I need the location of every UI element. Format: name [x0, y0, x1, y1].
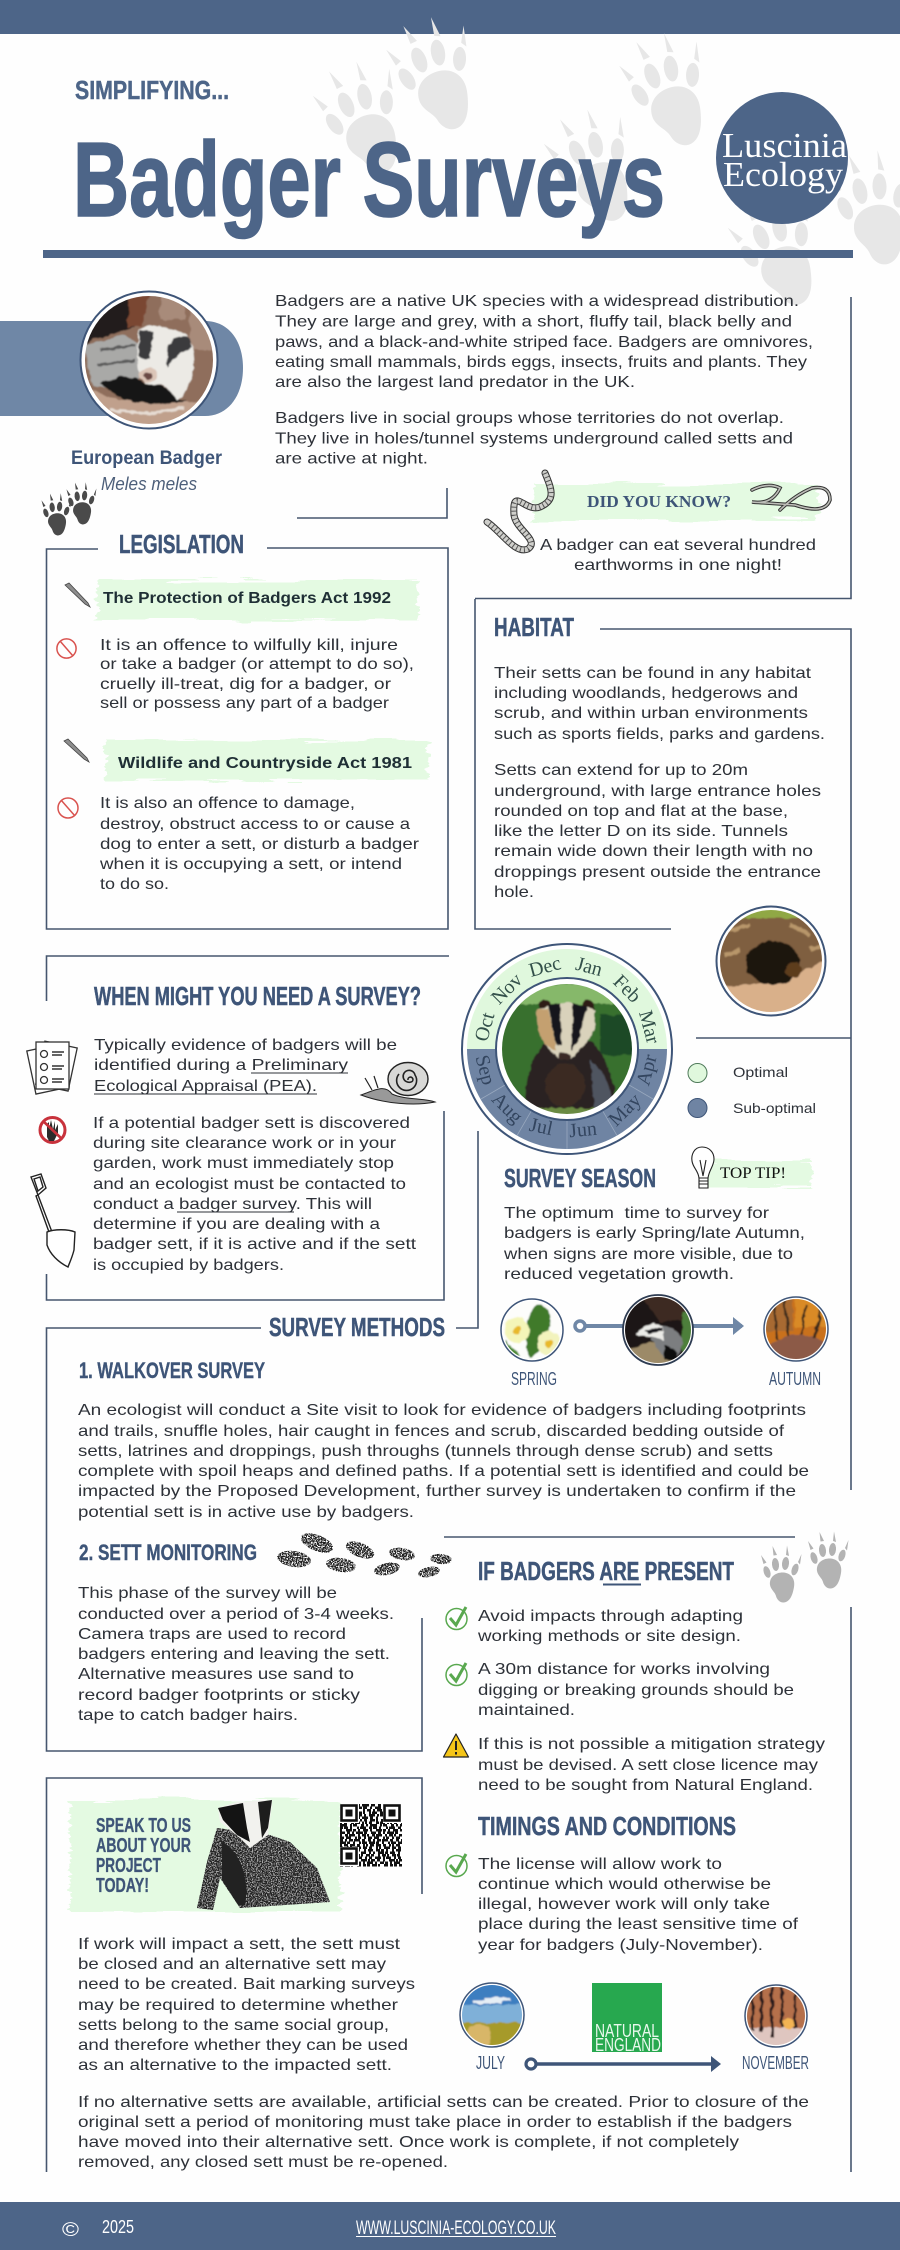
alternative sett text: be closed and an alternative sett may	[78, 1956, 386, 1973]
latin name: Meles meles	[101, 474, 197, 494]
legend	[688, 1064, 816, 1118]
icon: grey paws	[761, 1532, 848, 1603]
season text: reduced vegetation growth.	[504, 1266, 734, 1283]
photo: badger on grass	[500, 980, 634, 1116]
panel: survey season	[501, 1147, 828, 1389]
season text: when signs are more visible, due to	[503, 1246, 793, 1263]
artificial sett text: have moved into their alternative sett. Once work is complete, if not completely	[78, 2134, 739, 2151]
panel: survey season: AUTUMN	[769, 1369, 821, 1389]
call to action: SPEAK TO US	[96, 1815, 191, 1837]
highlight brush	[534, 484, 818, 520]
panel: if badgers are present: NOVEMBER	[742, 2053, 809, 2073]
list item 3: If this is not possible a mitigation strategy	[478, 1736, 825, 1753]
list item 3	[478, 1736, 825, 1794]
sett monitoring text: record badger footprints or sticky	[78, 1687, 360, 1704]
list item 3: must be devised. A sett close licence may	[478, 1757, 818, 1774]
icon: prohibited 2	[58, 798, 78, 818]
heading: DID YOU KNOW?	[587, 492, 731, 511]
panel: survey season calendar wheel	[462, 944, 672, 1154]
illustration: sketched badger	[197, 1800, 330, 1910]
icon: checklist	[27, 1041, 77, 1094]
sub-optimal months segment	[467, 1049, 667, 1149]
alternative sett text: may be required to determine whether	[78, 1997, 399, 2014]
season labels: SPRING	[511, 1369, 557, 1389]
panel: habitat	[475, 599, 851, 1016]
season text: badgers is early Spring/late Autumn,	[504, 1225, 805, 1242]
timings heading: TIMINGS AND CONDITIONS	[478, 1811, 736, 1841]
icon: light bulb	[692, 1147, 714, 1188]
timings text: continue which would otherwise be	[478, 1876, 771, 1893]
timing labels: JULY	[476, 2053, 505, 2073]
background paw prints	[307, 9, 900, 318]
panel: legislation	[46, 529, 448, 929]
icon: curled worm	[752, 485, 830, 510]
photo: July field	[460, 1983, 524, 2049]
panel: survey methods	[46, 1312, 809, 1751]
sub-optimal month labels: Aug	[487, 1088, 527, 1128]
icon: snail	[361, 1062, 435, 1104]
intro text: eating small mammals, birds eggs, insects, fruits and plants. They	[275, 354, 807, 371]
list item 3: need to be sought from Natural England.	[478, 1777, 813, 1794]
PEA text	[94, 1037, 397, 1095]
habitat text: remain wide down their length with no	[494, 843, 813, 860]
intro text: They are large and grey, with a short, fluffy tail, black belly and	[275, 314, 792, 330]
highlight brush	[70, 1800, 340, 1912]
intro text: Badgers are a native UK species with a widespread distribution.	[275, 293, 799, 310]
list item 1: working methods or site design.	[477, 1628, 741, 1645]
walkover heading: 1. WALKOVER SURVEY	[79, 1358, 265, 1383]
habitat text: including woodlands, hedgerows and	[494, 685, 798, 702]
footer	[0, 2202, 900, 2250]
timings text: year for badgers (July-November).	[478, 1937, 763, 1954]
offence text 1	[100, 637, 414, 712]
walkover text: setts, latrines and droppings, push throughs (tunnels through dense scrub) and setts	[78, 1443, 773, 1460]
photo: spring primroses	[501, 1298, 564, 1362]
sett monitoring text: Camera traps are used to record	[78, 1626, 346, 1643]
season arrow	[575, 1317, 744, 1335]
icon: footprints	[276, 1529, 452, 1579]
top tip: TOP TIP!	[720, 1165, 786, 1182]
offence text 1: or take a badger (or attempt to do so),	[100, 656, 414, 673]
PEA text: Ecological Appraisal (PEA).	[94, 1078, 317, 1095]
walkover text: and trails, snuffle holes, hair caught in fences and scrub, discarded bedding outside of	[78, 1423, 785, 1440]
optimal months segment	[467, 949, 667, 1049]
habitat text: underground, with large entrance holes	[494, 783, 821, 800]
icon: check 3	[446, 1854, 467, 1876]
top tip	[692, 1147, 812, 1188]
alternative sett text	[78, 1936, 415, 2074]
alternative sett text: and therefore whether they can be used	[78, 2037, 408, 2054]
offence text 1: cruelly ill-treat, dig for a badger, or	[100, 676, 392, 693]
list item 2	[478, 1661, 794, 1719]
highlight brush 1	[97, 580, 418, 620]
legend: Sub-optimal	[733, 1100, 816, 1116]
icon: pencil 2	[64, 739, 89, 762]
act title 2: Wildlife and Countryside Act 1981	[118, 755, 412, 772]
sett discovery text	[93, 1115, 417, 1274]
logo: Luscinia Ecology	[716, 92, 848, 224]
heading: IF BADGERS ARE PRESENT	[478, 1556, 734, 1586]
sub-optimal month labels: Jul	[527, 1114, 555, 1140]
alternative sett text: as an alternative to the impacted sett.	[78, 2057, 392, 2074]
sett discovery text: If a potential badger sett is discovered	[93, 1115, 410, 1132]
panel frame: intro	[297, 297, 851, 598]
intro text: are also the largest land predator in the UK.	[275, 374, 635, 391]
month labels: Dec	[527, 952, 564, 982]
heading: WHEN MIGHT YOU NEED A SURVEY?	[94, 981, 421, 1011]
habitat text: scrub, and within urban environments	[494, 705, 808, 722]
fact text: A badger can eat several hundred	[540, 537, 816, 554]
icon: check 2	[446, 1663, 467, 1686]
sett monitoring text	[78, 1585, 394, 1724]
species name: European Badger	[71, 448, 223, 469]
month labels: Oct	[471, 1010, 499, 1044]
habitat text: hole.	[494, 884, 534, 901]
sett monitoring heading: 2. SETT MONITORING	[79, 1540, 257, 1565]
call to action: PROJECT	[96, 1855, 161, 1877]
sett monitoring text: Alternative measures use sand to	[78, 1666, 354, 1683]
walkover text: potential sett is in active use by badgers.	[78, 1504, 414, 1521]
intro text	[275, 293, 813, 468]
legend: Optimal	[733, 1064, 788, 1080]
icon: small paws	[41, 482, 96, 535]
blue band	[0, 321, 243, 416]
sub-optimal month labels: Jun	[568, 1118, 598, 1142]
intro text: paws, and a black-and-white striped face. Badgers are omnivores,	[275, 334, 813, 351]
panel: if badgers are present	[444, 1532, 848, 2073]
sett discovery text: conduct a badger survey. This will	[93, 1196, 372, 1213]
artificial sett text: If no alternative setts are available, artificial setts can be created. Prior to closure of the	[78, 2094, 809, 2111]
list item 2: maintained.	[478, 1702, 575, 1719]
month labels	[471, 952, 664, 1046]
highlight brush 2	[106, 740, 428, 780]
act title 1: The Protection of Badgers Act 1992	[103, 590, 391, 607]
panel: did you know	[487, 473, 830, 574]
habitat text: droppings present outside the entrance	[494, 864, 821, 881]
month labels: Jan	[573, 953, 605, 981]
list item 1: Avoid impacts through adapting	[478, 1608, 743, 1625]
year: 2025	[102, 2217, 134, 2237]
intro text: are active at night.	[275, 450, 428, 468]
offence text 2	[99, 795, 420, 893]
logo: Luscinia Ecology: Luscinia	[722, 126, 847, 165]
heading: SURVEY SEASON	[504, 1163, 656, 1193]
habitat text	[494, 665, 825, 901]
walkover text	[78, 1402, 809, 1521]
offence text 2: dog to enter a sett, or disturb a badger	[100, 836, 420, 853]
panel: species portrait	[0, 290, 243, 494]
logo: Luscinia Ecology: Ecology	[723, 155, 844, 194]
sett monitoring text: badgers entering and leaving the sett.	[78, 1646, 390, 1663]
sett discovery text: determine if you are dealing with a	[93, 1216, 380, 1233]
month labels: Nov	[487, 969, 527, 1009]
offence text 2: to do so.	[100, 876, 169, 893]
offence text 2: destroy, obstruct access to or cause a	[100, 816, 410, 833]
copyright: ©	[62, 2220, 79, 2241]
alternative sett text: need to be created. Bait marking surveys	[78, 1976, 415, 1993]
alternative sett text: setts belong to the same social group,	[78, 2017, 389, 2034]
call to action: TODAY!	[96, 1875, 149, 1897]
walkover text: An ecologist will conduct a Site visit to look for evidence of badgers including footprints	[78, 1402, 806, 1419]
sett discovery text: is occupied by badgers.	[93, 1257, 284, 1274]
icon: pencil 1	[65, 583, 90, 607]
intro text: They live in holes/tunnel systems underground called setts and	[275, 430, 793, 448]
list item 2: A 30m distance for works involving	[478, 1661, 770, 1678]
sub-optimal month labels: Apr	[632, 1052, 662, 1088]
icon: check 1	[446, 1607, 467, 1630]
photo: autumn woodland	[764, 1297, 828, 1361]
website: WWW.LUSCINIA-ECOLOGY.CO.UK	[356, 2218, 556, 2239]
habitat text: such as sports fields, parks and gardens.	[494, 726, 825, 743]
sett discovery text: during site clearance work or in your	[93, 1135, 397, 1152]
photo: November forest	[745, 1985, 807, 2048]
month labels: Feb	[609, 971, 645, 1007]
month labels: Mar	[634, 1008, 664, 1046]
timing arrow	[526, 2056, 721, 2072]
icon: shovel	[31, 1174, 75, 1267]
timings text: place during the least sensitive time of	[478, 1916, 799, 1933]
timings text	[478, 1856, 799, 1954]
walkover text: impacted by the Proposed Development, further survey is undertaken to confirm if the	[78, 1483, 796, 1500]
list item 2: digging or breaking grounds should be	[478, 1682, 794, 1699]
right frame: season panel	[696, 906, 851, 2172]
habitat text: Their setts can be found in any habitat	[494, 665, 812, 682]
heading: HABITAT	[494, 612, 574, 642]
artificial sett text: original sett a period of monitoring must take place in order to establish if the badgers	[78, 2114, 792, 2131]
header divider	[43, 250, 853, 258]
offence text 2: It is also an offence to damage,	[100, 795, 355, 812]
frame: survey season left rule	[456, 1131, 478, 1328]
offence text 1: sell or possess any part of a badger	[100, 695, 390, 712]
timings text: illegal, however work will only take	[478, 1896, 770, 1913]
artificial sett text	[78, 2094, 809, 2171]
season text	[503, 1205, 805, 1283]
heading: SURVEY METHODS	[269, 1312, 445, 1342]
habitat text: like the letter D on its side. Tunnels	[494, 823, 788, 840]
artificial sett text: removed, any closed sett must be re-opened.	[78, 2154, 448, 2171]
panel: speak to us	[46, 1778, 809, 2172]
icon: prohibited 1	[57, 639, 76, 658]
title: Badger Surveys	[73, 121, 665, 239]
sub-optimal month labels: May	[604, 1089, 646, 1131]
sett monitoring text: conducted over a period of 3-4 weeks.	[78, 1606, 394, 1623]
header bar	[0, 0, 900, 34]
photo: badger portrait	[80, 290, 220, 430]
QR code	[340, 1804, 402, 1866]
sett monitoring text: This phase of the survey will be	[78, 1585, 337, 1602]
offence text 2: when it is occupying a sett, or intend	[99, 856, 402, 873]
alternative sett text: If work will impact a sett, the sett must	[78, 1936, 401, 1953]
habitat text: Setts can extend for up to 20m	[494, 762, 748, 779]
sett discovery text: and an ecologist must be contacted to	[93, 1176, 406, 1193]
icon: stop hand	[40, 1118, 65, 1142]
list item 1	[477, 1608, 743, 1645]
intro text: Badgers live in social groups whose territories do not overlap.	[275, 410, 784, 427]
logo: Natural England	[592, 1983, 662, 2055]
sett monitoring text: tape to catch badger hairs.	[78, 1707, 298, 1724]
season text: The optimum time to survey for	[504, 1205, 770, 1222]
logo: Natural England: NATURAL	[595, 2021, 659, 2041]
sub-optimal month labels	[470, 1052, 662, 1142]
heading: LEGISLATION	[119, 529, 244, 559]
subtitle: SIMPLIFYING...	[75, 75, 229, 105]
icon: warning	[444, 1734, 468, 1757]
call to action: ABOUT YOUR	[96, 1835, 191, 1857]
timings text: The license will allow work to	[478, 1856, 722, 1873]
panel: did you know: earthworms in one night!	[574, 557, 782, 574]
panel: when might you need a survey	[27, 956, 449, 1300]
walkover text: complete with spoil heaps and defined paths. If a potential sett is identified and could be	[78, 1463, 809, 1480]
photo: badger by log	[623, 1295, 693, 1365]
offence text 1: It is an offence to wilfully kill, injure	[100, 637, 398, 654]
PEA text: identified during a Preliminary	[94, 1057, 348, 1074]
sub-optimal month labels: Sep	[470, 1053, 500, 1087]
photo: sett entrance	[716, 906, 826, 1016]
call to action	[96, 1815, 191, 1897]
sett discovery text: garden, work must immediately stop	[93, 1155, 394, 1172]
PEA text: Typically evidence of badgers will be	[94, 1037, 397, 1054]
sett discovery text: badger sett, if it is active and if the sett	[93, 1236, 417, 1253]
habitat text: rounded on top and flat at the base,	[494, 803, 788, 820]
logo: Natural England: ENGLAND	[595, 2035, 661, 2055]
icon: long worm	[487, 473, 551, 550]
